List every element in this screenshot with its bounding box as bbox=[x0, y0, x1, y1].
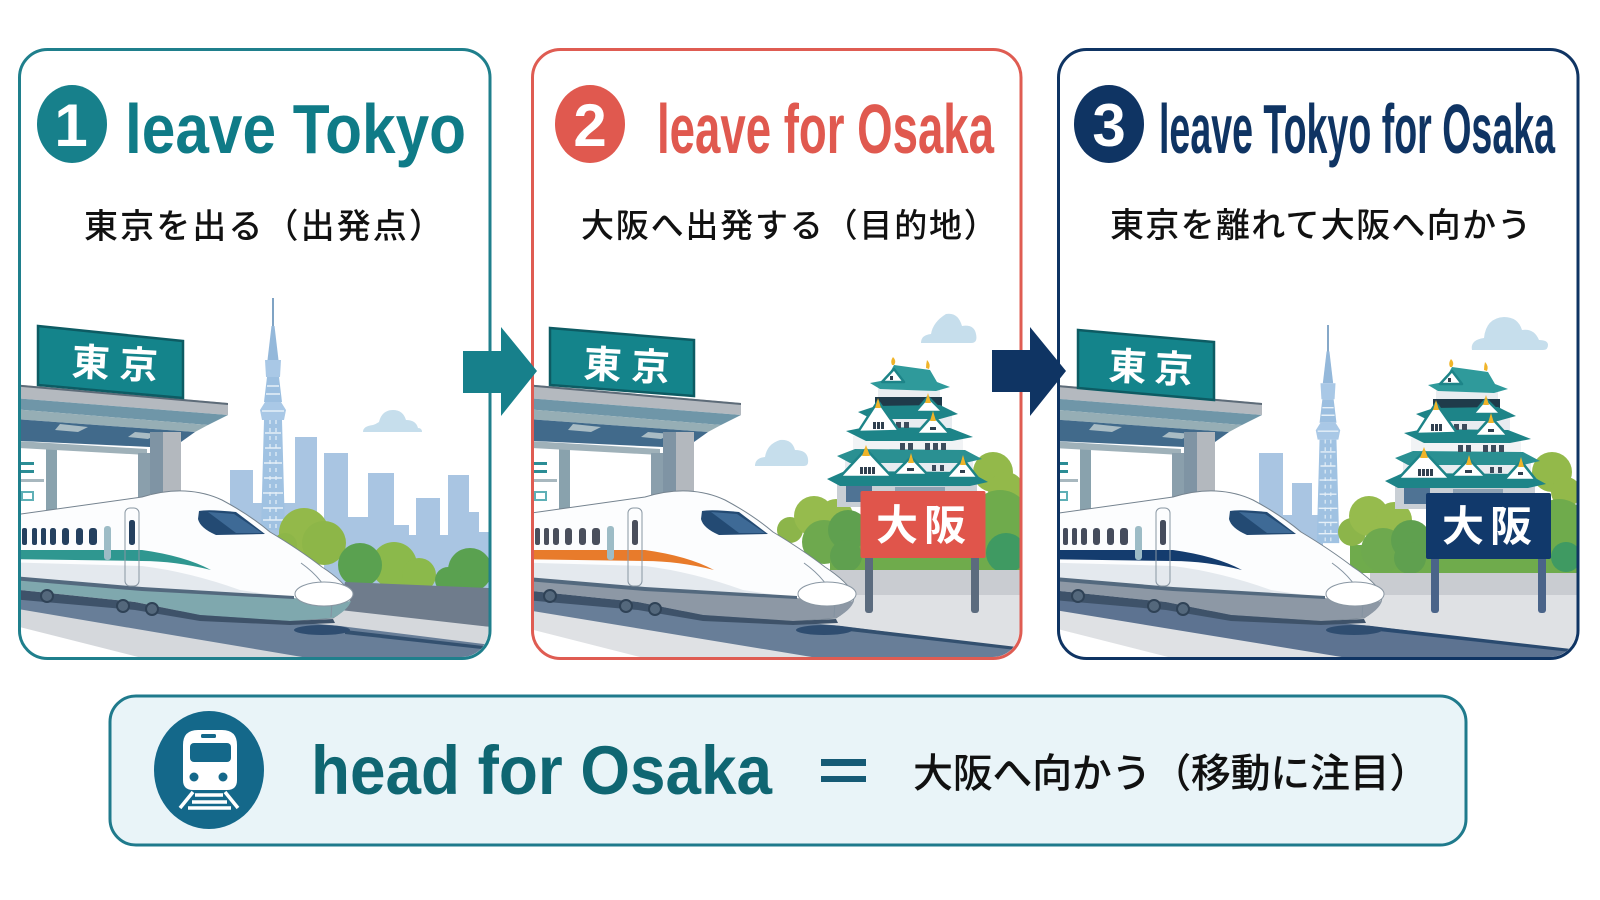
number badge 2: 2 bbox=[573, 92, 607, 159]
skyline bbox=[1259, 453, 1323, 555]
heading: leave for Osaka: leave for Osaka bbox=[657, 90, 995, 168]
subtitle: 東京を離れて大阪へ向かう bbox=[1110, 207, 1533, 245]
retaining wall bbox=[338, 582, 490, 627]
panel 2 background bbox=[532, 50, 1021, 658]
front trees bbox=[802, 510, 862, 570]
cloud top bbox=[921, 314, 976, 343]
signboard: Osaka bbox=[1426, 493, 1551, 559]
ground bbox=[1060, 595, 1576, 657]
sign text: 東京 bbox=[1108, 346, 1202, 393]
summary background bbox=[110, 696, 1466, 845]
train bbox=[1031, 491, 1384, 625]
wall bbox=[1370, 573, 1580, 595]
illustration: station, Skytree, castle and train bbox=[1030, 317, 1587, 660]
signboard posts bbox=[1431, 555, 1546, 613]
front trees bbox=[1361, 520, 1431, 574]
panel: leave Tokyo bbox=[0, 50, 500, 660]
panel 2 border bbox=[532, 50, 1021, 658]
track bbox=[1060, 600, 1569, 657]
panel 1 border bbox=[20, 50, 490, 658]
meaning text: 大阪へ向かう（移動に注目） bbox=[913, 752, 1429, 796]
heading: leave Tokyo: leave Tokyo bbox=[125, 90, 466, 168]
icon: Osaka Castle bbox=[827, 357, 988, 507]
station sign: Tokyo bbox=[550, 328, 694, 396]
panel 3 background bbox=[1058, 50, 1578, 658]
station sign: Tokyo bbox=[38, 326, 183, 398]
sign text: 東京 bbox=[71, 342, 169, 389]
station bbox=[1060, 385, 1262, 510]
number badge 1 bbox=[37, 85, 107, 163]
train bbox=[0, 491, 353, 625]
track bbox=[534, 600, 1014, 657]
number badge 1: 1 bbox=[54, 92, 88, 159]
station bbox=[534, 384, 741, 509]
panel: head for Osaka bbox=[110, 696, 1466, 845]
panel: leave Tokyo for Osaka bbox=[1030, 50, 1587, 660]
panel 1 background bbox=[20, 50, 490, 658]
cloud left bbox=[755, 440, 808, 466]
station bbox=[21, 384, 228, 510]
number badge 2 bbox=[555, 85, 625, 163]
illustration: station, Osaka castle and train bbox=[502, 314, 1030, 660]
trees bbox=[273, 508, 492, 593]
signboard text: 大阪 bbox=[1442, 503, 1538, 550]
trees bbox=[1338, 452, 1587, 573]
icon: cloud bbox=[363, 410, 422, 432]
panel 3 border bbox=[1058, 50, 1578, 658]
station sign: Tokyo bbox=[1078, 330, 1214, 400]
trees bbox=[777, 452, 1030, 573]
number badge 3: 3 bbox=[1092, 92, 1126, 159]
ground bbox=[534, 595, 1020, 657]
icon: Tokyo Skytree bbox=[260, 298, 286, 530]
track bbox=[21, 600, 484, 657]
signboard text: 大阪 bbox=[876, 502, 972, 549]
sign text: 東京 bbox=[583, 344, 681, 391]
wall bbox=[830, 570, 1025, 595]
illustration: Tokyo station, Skytree and train bbox=[0, 298, 500, 660]
cloud bbox=[1472, 317, 1548, 350]
arrow: panel 1 to 2 bbox=[463, 327, 537, 416]
subtitle: 東京を出る（出発点） bbox=[84, 208, 445, 246]
train bbox=[503, 491, 856, 625]
number badge 3 bbox=[1074, 85, 1144, 163]
panel: leave for Osaka bbox=[502, 50, 1030, 660]
icon: Osaka Castle bbox=[1385, 359, 1546, 509]
icon: Tokyo Skytree bbox=[1316, 325, 1340, 543]
arrow: panel 2 to 3 bbox=[992, 327, 1066, 416]
equals sign bbox=[821, 759, 866, 782]
signboard: Osaka bbox=[860, 491, 986, 558]
heading: head for Osaka: head for Osaka bbox=[311, 732, 773, 809]
signboard posts bbox=[865, 555, 979, 613]
icon: train in circle bbox=[154, 711, 264, 829]
subtitle: 大阪へ出発する（目的地） bbox=[581, 207, 999, 244]
ground bbox=[21, 606, 488, 657]
skyline bbox=[230, 437, 491, 590]
